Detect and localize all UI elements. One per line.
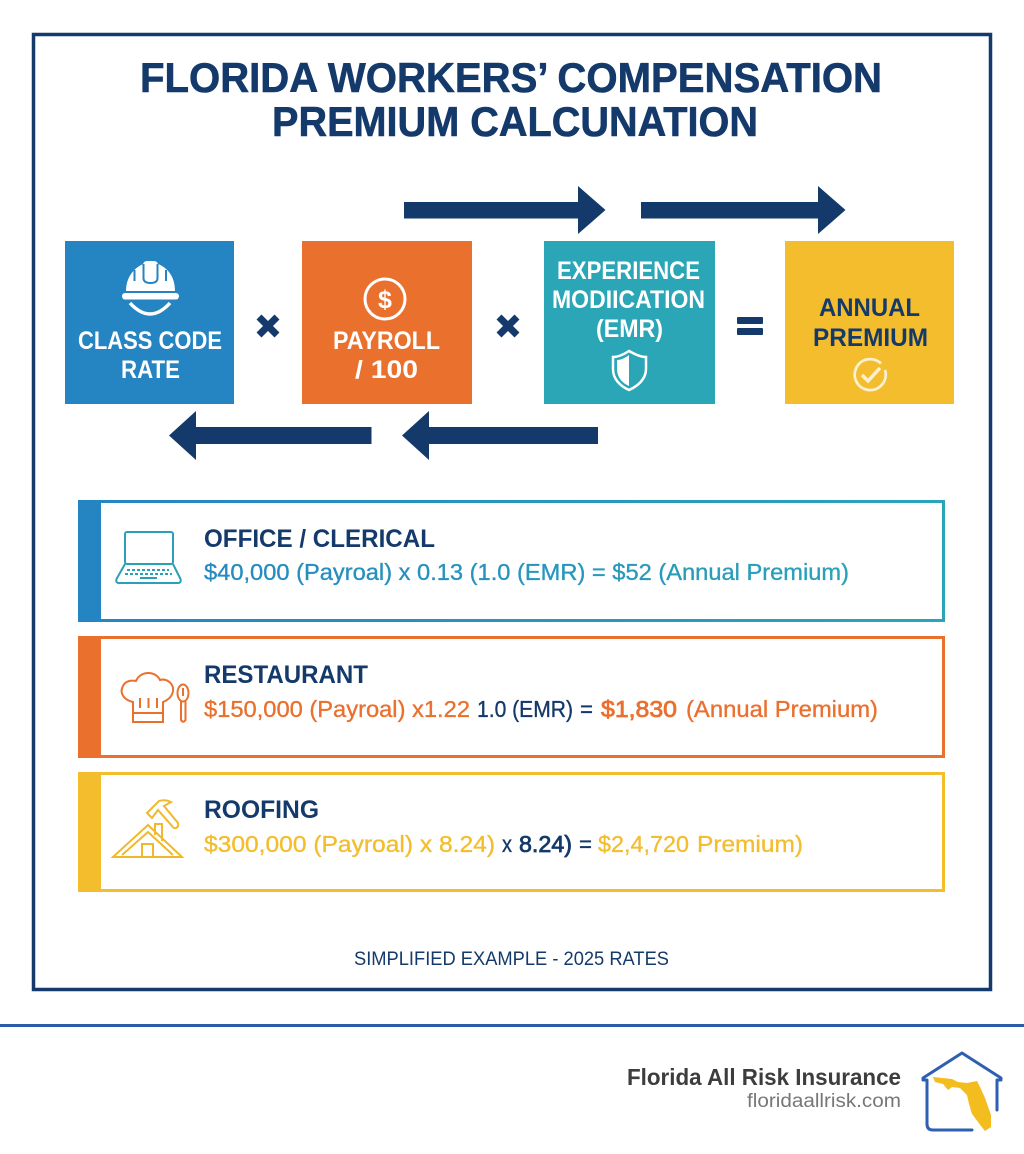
- label: ANNUAL: [819, 294, 920, 322]
- icon: laptop: [116, 532, 181, 583]
- icon: chef hat and spoon: [122, 673, 188, 722]
- caption: SIMPLIFIED EXAMPLE - 2025 RATES: [354, 948, 669, 970]
- icon: dollar coin: [365, 279, 405, 319]
- label: CLASS CODE: [78, 327, 222, 355]
- formula: $40,000 (Payroal) x 0.13 (1.0 (EMR) = $52 (Annual Premium): [204, 559, 849, 585]
- formula: $150,000 (Payroal) x1.22: [204, 696, 470, 722]
- label: EXPERIENCE: [557, 257, 700, 285]
- outer frame: [34, 34, 990, 990]
- footer brand text: [627, 1064, 901, 1112]
- label: [813, 294, 928, 352]
- multiply sign 2: [499, 317, 517, 335]
- formula: [204, 696, 878, 722]
- arrow: top right 1: [404, 186, 606, 234]
- panel: restaurant: [78, 636, 944, 758]
- footer brand text: floridaallrisk.com: [747, 1091, 901, 1112]
- formula: 1.0 (EMR): [477, 696, 573, 722]
- heading: OFFICE / CLERICAL: [204, 525, 435, 553]
- panel: experience modification: [544, 241, 715, 404]
- logo: house with Florida: [923, 1053, 1001, 1131]
- title: FLORIDA WORKERS’ COMPENSATION: [140, 54, 882, 101]
- title: [140, 54, 882, 145]
- panel: roofing: [78, 772, 944, 892]
- title: PREMIUM CALCUNATION: [272, 98, 758, 145]
- heading: ROOFING: [204, 796, 319, 824]
- arrow: bottom left 1: [169, 411, 372, 460]
- icon: hard hat: [122, 261, 179, 314]
- label: / 100: [355, 356, 418, 384]
- panel: office / clerical: [78, 500, 944, 622]
- formula: Premium): [697, 831, 803, 857]
- formula: $300,000 (Payroal) x 8.24): [204, 831, 495, 857]
- panel: annual premium: [785, 241, 954, 404]
- label: PREMIUM: [813, 324, 928, 352]
- formula: (Annual Premium): [686, 696, 878, 722]
- arrow: bottom left 2: [402, 411, 598, 460]
- label: RATE: [121, 356, 180, 384]
- formula: =: [580, 696, 593, 722]
- label: [78, 327, 222, 384]
- panel: class code rate: [65, 241, 234, 404]
- label: [333, 327, 440, 384]
- formula: 8.24): [519, 831, 572, 857]
- label: MODIICATION: [552, 286, 705, 314]
- label: PAYROLL: [333, 327, 440, 355]
- formula: $1,830: [601, 696, 677, 722]
- formula: [204, 831, 803, 857]
- formula: x: [502, 831, 512, 857]
- heading: RESTAURANT: [204, 661, 368, 689]
- label: (EMR): [596, 315, 663, 343]
- formula: =: [579, 831, 592, 857]
- footer divider: [0, 1024, 1024, 1027]
- equals sign: [737, 317, 763, 335]
- footer brand text: Florida All Risk Insurance: [627, 1064, 901, 1090]
- icon: shield: [613, 351, 646, 390]
- arrow: top right 2: [641, 186, 846, 234]
- multiply sign 1: [259, 317, 277, 335]
- formula: $2,4,720: [598, 831, 689, 857]
- panel: payroll: [302, 241, 472, 404]
- label: [552, 257, 705, 343]
- icon: house and hammer: [113, 800, 182, 857]
- icon: dollar coin: $: [378, 286, 392, 314]
- icon: check circle: [855, 359, 886, 390]
